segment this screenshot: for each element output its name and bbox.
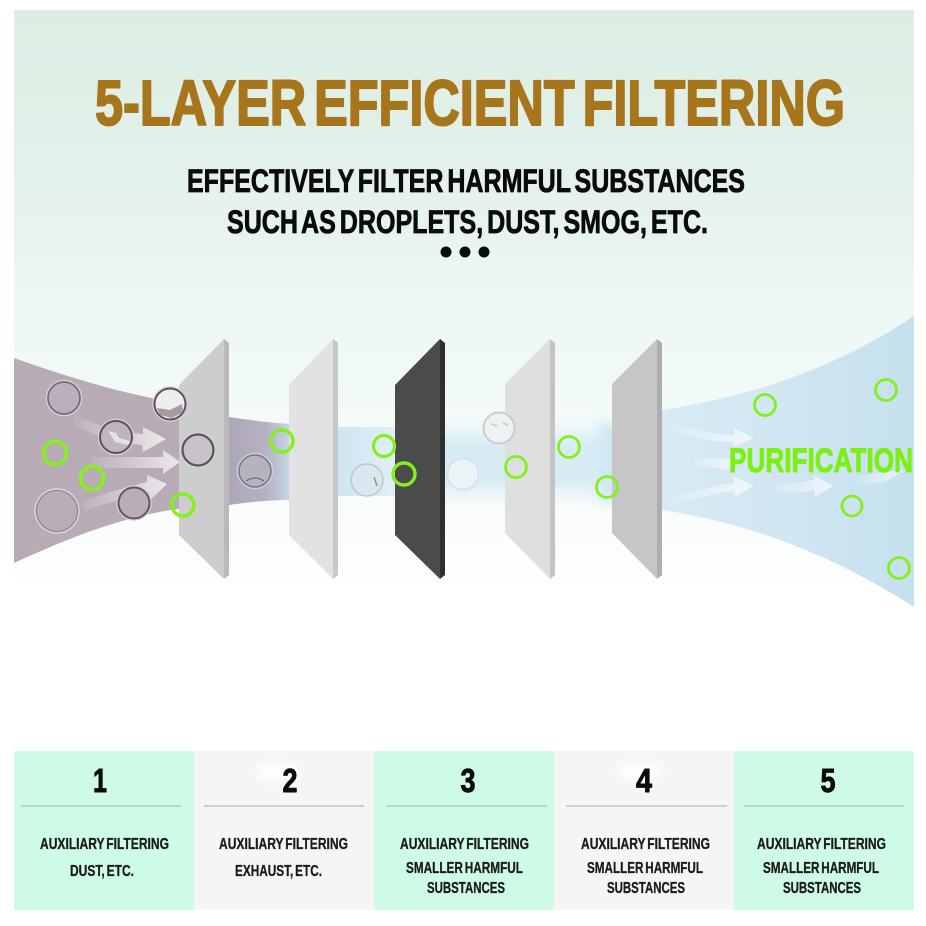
card 2	[194, 751, 374, 910]
subtitle line 2: SUCH AS DROPLETS, DUST, SMOG, ETC.	[227, 204, 708, 240]
airflow: after layer 1	[229, 417, 291, 505]
airflow: after layer 2	[338, 427, 396, 496]
airflow: purified air	[662, 316, 914, 607]
card 4: AUXILIARY FILTERING	[581, 836, 710, 853]
card 4: 4	[636, 762, 653, 799]
card 1: 1	[93, 762, 107, 799]
card 1	[14, 751, 194, 910]
card 5: SMALLER HARMFUL	[763, 860, 879, 877]
card 4	[554, 751, 734, 910]
card 3: AUXILIARY FILTERING	[400, 836, 529, 853]
card 4: SMALLER HARMFUL	[587, 860, 703, 877]
card 5	[734, 751, 914, 910]
subtitle line 1: EFFECTIVELY FILTER HARMFUL SUBSTANCES	[187, 163, 745, 199]
card 3: SUBSTANCES	[427, 880, 505, 897]
card 1: DUST, ETC.	[70, 863, 134, 880]
card 4: SUBSTANCES	[607, 880, 685, 897]
clean particles: green rings	[44, 380, 910, 578]
card 3: 3	[460, 762, 476, 799]
airflow: after layer 3 and 4	[445, 418, 613, 508]
filter layer 4	[505, 339, 555, 579]
filter layer 2	[289, 339, 338, 579]
card 5: AUXILIARY FILTERING	[757, 836, 886, 853]
card 1: AUXILIARY FILTERING	[40, 836, 169, 853]
three dots	[440, 246, 490, 258]
background panel	[14, 10, 914, 710]
layer table	[14, 751, 914, 910]
card 2: 2	[282, 762, 298, 799]
card 3: SMALLER HARMFUL	[406, 860, 523, 877]
dust particles	[35, 380, 514, 533]
card 3	[374, 751, 554, 910]
filter layer 3	[395, 339, 445, 579]
arrows: purified air	[668, 421, 905, 508]
card 2: AUXILIARY FILTERING	[219, 836, 348, 853]
airflow: polluted air	[14, 358, 185, 563]
filter layer 5	[612, 339, 662, 579]
card 5: SUBSTANCES	[783, 880, 861, 897]
filter layer 1	[179, 339, 229, 579]
arrows: incoming air	[72, 415, 180, 511]
card 2: EXHAUST, ETC.	[235, 863, 322, 880]
airflow: glow before layer 5	[600, 420, 693, 505]
card 5: 5	[820, 762, 836, 799]
